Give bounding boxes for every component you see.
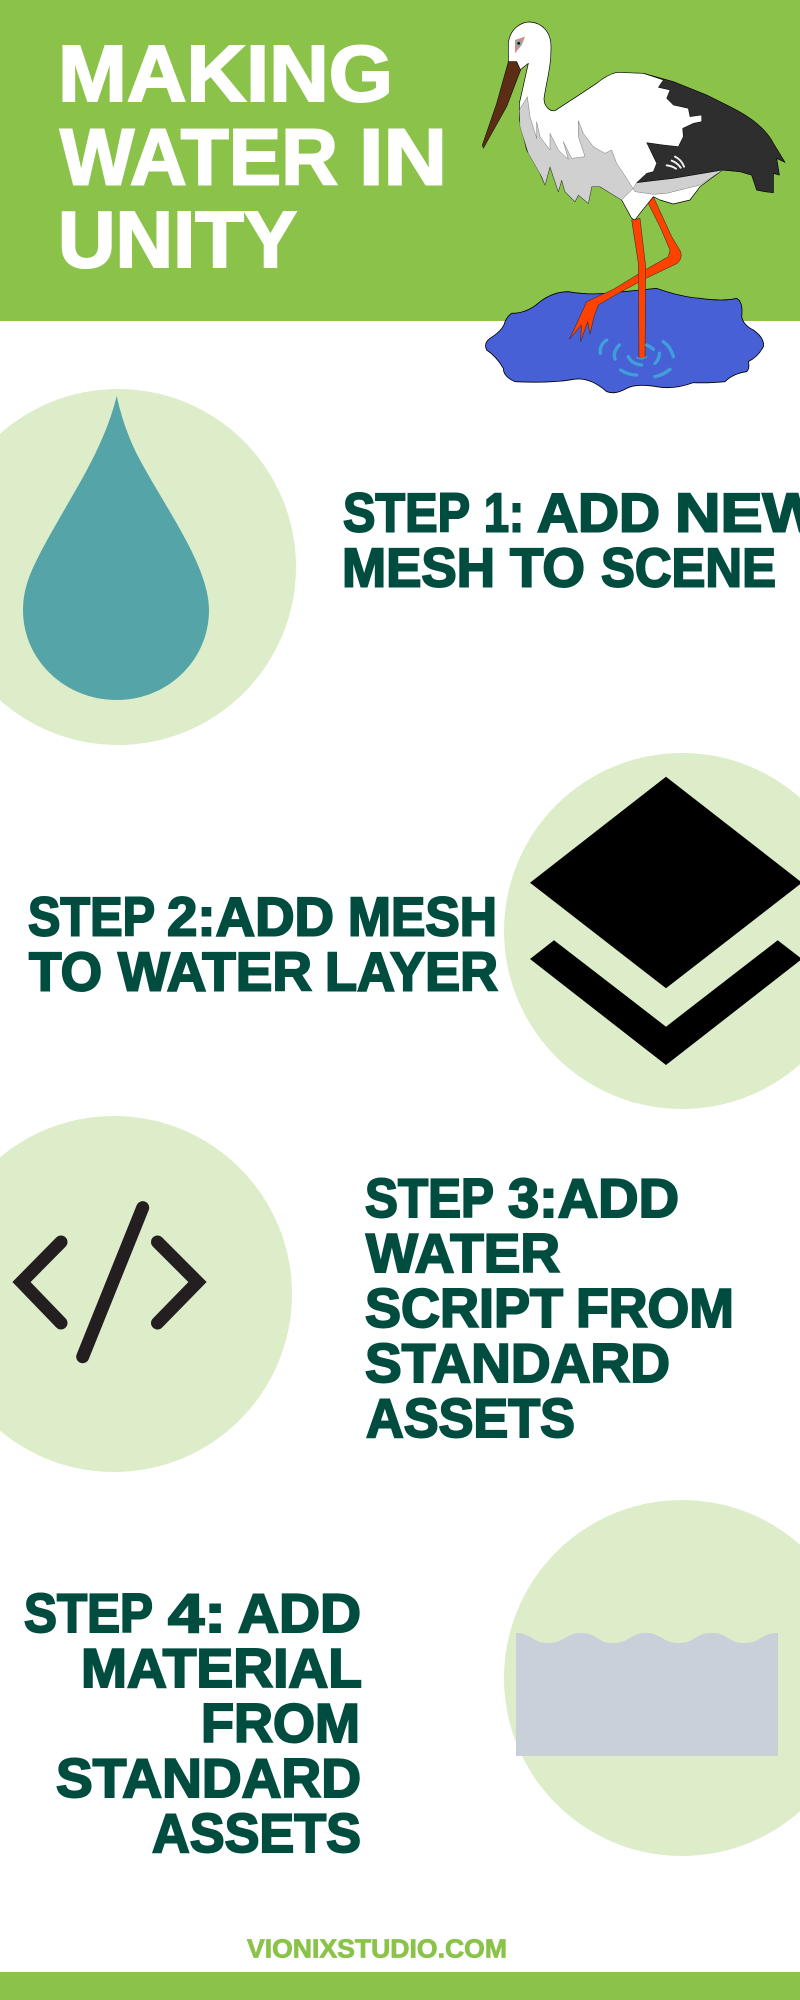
step 2 heading: MESH [348, 886, 497, 948]
step 4 heading: STANDARD [56, 1747, 361, 1809]
step 3 panel [0, 1116, 734, 1472]
step 4 heading: ASSETS [152, 1802, 361, 1864]
step 2 circle [504, 753, 800, 1109]
step 1 panel [0, 389, 800, 745]
step 3 heading: STEP [365, 1167, 494, 1229]
header band [0, 0, 800, 321]
title: MAKING [58, 29, 393, 118]
step 4 heading: ADD [238, 1582, 361, 1644]
standing leg [632, 218, 646, 358]
step 4 heading: STEP [24, 1582, 153, 1644]
step 1 heading: 1: [484, 482, 524, 544]
dark wing [637, 73, 785, 193]
step 3 heading: 3:ADD [508, 1167, 679, 1229]
step 2 heading: STEP [28, 886, 155, 948]
eye [515, 37, 525, 53]
step 1 heading: MESH [342, 536, 495, 598]
icon: layers [530, 777, 800, 1065]
step 2 heading: 2:ADD [167, 886, 334, 948]
step 4 heading: 4: [168, 1582, 226, 1644]
step 3 heading: WATER [366, 1222, 560, 1284]
footer website text: VIONIXSTUDIO.COM [247, 1934, 507, 1964]
step 3 circle [0, 1116, 292, 1472]
step 1 heading: ADD [537, 482, 660, 544]
puddle [486, 288, 764, 393]
title: IN [359, 112, 447, 202]
icon: stork standing in puddle [482, 22, 785, 393]
step 3 heading: STANDARD [365, 1332, 670, 1394]
step 3 heading: FROM [576, 1277, 734, 1339]
step 4 circle [504, 1500, 800, 1856]
icon: water drop [23, 396, 209, 700]
step 4 heading: FROM [201, 1692, 360, 1754]
step 2 heading [28, 886, 498, 1002]
step 4 panel [24, 1500, 800, 1864]
step 1 heading [342, 482, 800, 598]
icon: water wave block [516, 1633, 778, 1756]
wing feather detail [667, 157, 684, 169]
step 2 heading: WATER [118, 940, 312, 1002]
step 3 heading: ASSETS [366, 1387, 575, 1449]
title: UNITY [58, 195, 297, 284]
beak [482, 62, 521, 148]
step 3 heading [365, 1167, 734, 1449]
step 4 heading: MATERIAL [81, 1637, 362, 1699]
step 1 heading: NEW [675, 482, 800, 544]
step 3 heading: SCRIPT [365, 1277, 563, 1339]
step 1 heading: STEP [343, 482, 470, 544]
grey belly feathers [519, 97, 723, 203]
ripples [600, 340, 673, 377]
step 4 heading [24, 1582, 362, 1864]
stork body [508, 22, 785, 220]
step 2 heading: TO [29, 940, 102, 1002]
step 1 circle [0, 389, 296, 745]
icon: code brackets [22, 1208, 198, 1357]
title [58, 29, 447, 284]
step 2 heading: LAYER [325, 940, 498, 1002]
step 2 panel [28, 753, 800, 1109]
bent leg [569, 197, 681, 342]
step 1 heading: TO [510, 536, 585, 598]
footer band [0, 1972, 800, 2000]
step 1 heading: SCENE [601, 536, 776, 598]
title: WATER [60, 112, 338, 202]
